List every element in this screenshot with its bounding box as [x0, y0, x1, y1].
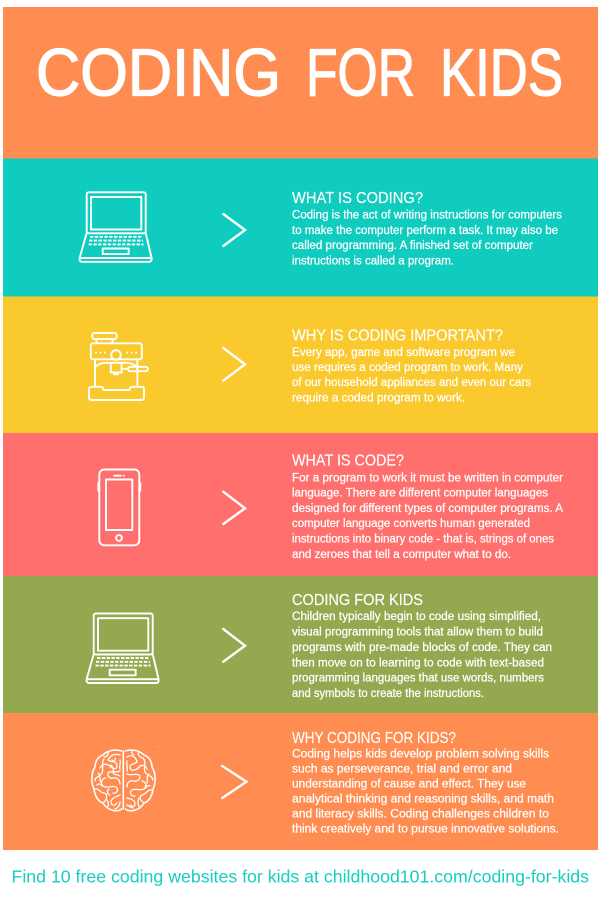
heading: WHY IS CODING IMPORTANT?: [292, 328, 503, 345]
body text: Children typically begin to code using simplified,: [292, 611, 541, 623]
body text: to make the computer perform a task. It may also be: [292, 225, 558, 237]
panel: what is code: [3, 433, 598, 576]
panel: why is coding important: [3, 296, 598, 434]
icon: brain: [92, 747, 158, 811]
body text: For a program to work it must be written in computer: [292, 473, 563, 485]
body text: called programming. A finished set of computer: [292, 240, 533, 252]
arrow: [222, 766, 246, 798]
icon: coffee machine: [89, 333, 148, 400]
title: FOR: [306, 36, 415, 110]
icon: smartphone: [98, 470, 140, 545]
body text: [292, 347, 531, 404]
body text: require a coded program to work.: [292, 392, 465, 404]
panel: title banner: [3, 7, 598, 159]
icon: laptop: [87, 614, 159, 683]
body text: visual programming tools that allow them to build: [292, 627, 543, 639]
body text: programs with pre-made blocks of code. They can: [292, 642, 552, 654]
panel: why coding for kids: [3, 713, 598, 850]
body text: [292, 210, 562, 267]
panel: what is coding: [3, 158, 598, 296]
body text: Every app, game and software program we: [292, 347, 515, 359]
body text: of our household appliances and even our cars: [292, 377, 531, 389]
body text: such as perseverance, trial and error and: [292, 764, 512, 776]
heading: WHY CODING FOR KIDS?: [292, 730, 456, 747]
body text: think creatively and to pursue innovative solutions.: [292, 823, 559, 835]
panel: coding for kids: [3, 576, 598, 713]
body text: computer language converts human generated: [292, 518, 530, 530]
arrow: [223, 348, 245, 381]
body text: instructions into binary code - that is, strings of ones: [292, 534, 554, 546]
body text: designed for different types of computer programs. A: [292, 503, 563, 515]
body text: [292, 611, 552, 700]
arrow: [223, 629, 245, 662]
title: CODING: [36, 36, 281, 110]
body text: Coding is the act of writing instructions for computers: [292, 210, 562, 222]
body text: [292, 749, 559, 835]
heading: CODING FOR KIDS: [292, 592, 423, 609]
footer link text: Find 10 free coding websites for kids at childhood101.com/coding-for-kids: [12, 866, 589, 886]
body text: and zeroes that tell a computer what to do.: [292, 549, 511, 561]
body text: analytical thinking and reasoning skills, and math: [292, 794, 554, 806]
body text: and symbols to create the instructions.: [292, 688, 484, 700]
body text: use requires a coded program to work. Many: [292, 362, 523, 374]
body text: understanding of cause and effect. They use: [292, 779, 526, 791]
body text: and literacy skills. Coding challenges children to: [292, 808, 549, 820]
arrow: [223, 214, 245, 246]
arrow: [223, 492, 245, 524]
heading: WHAT IS CODE?: [292, 452, 404, 470]
body text: programming languages that use words, numbers: [292, 673, 544, 685]
body text: Coding helps kids develop problem solving skills: [292, 749, 549, 761]
body text: then move on to learning to code with text-based: [292, 658, 544, 670]
body text: [292, 473, 563, 561]
body text: language. There are different computer languages: [292, 488, 548, 500]
icon: laptop: [80, 192, 152, 262]
title: KIDS: [440, 36, 563, 110]
body text: instructions is called a program.: [292, 255, 454, 267]
heading: WHAT IS CODING?: [292, 190, 423, 207]
